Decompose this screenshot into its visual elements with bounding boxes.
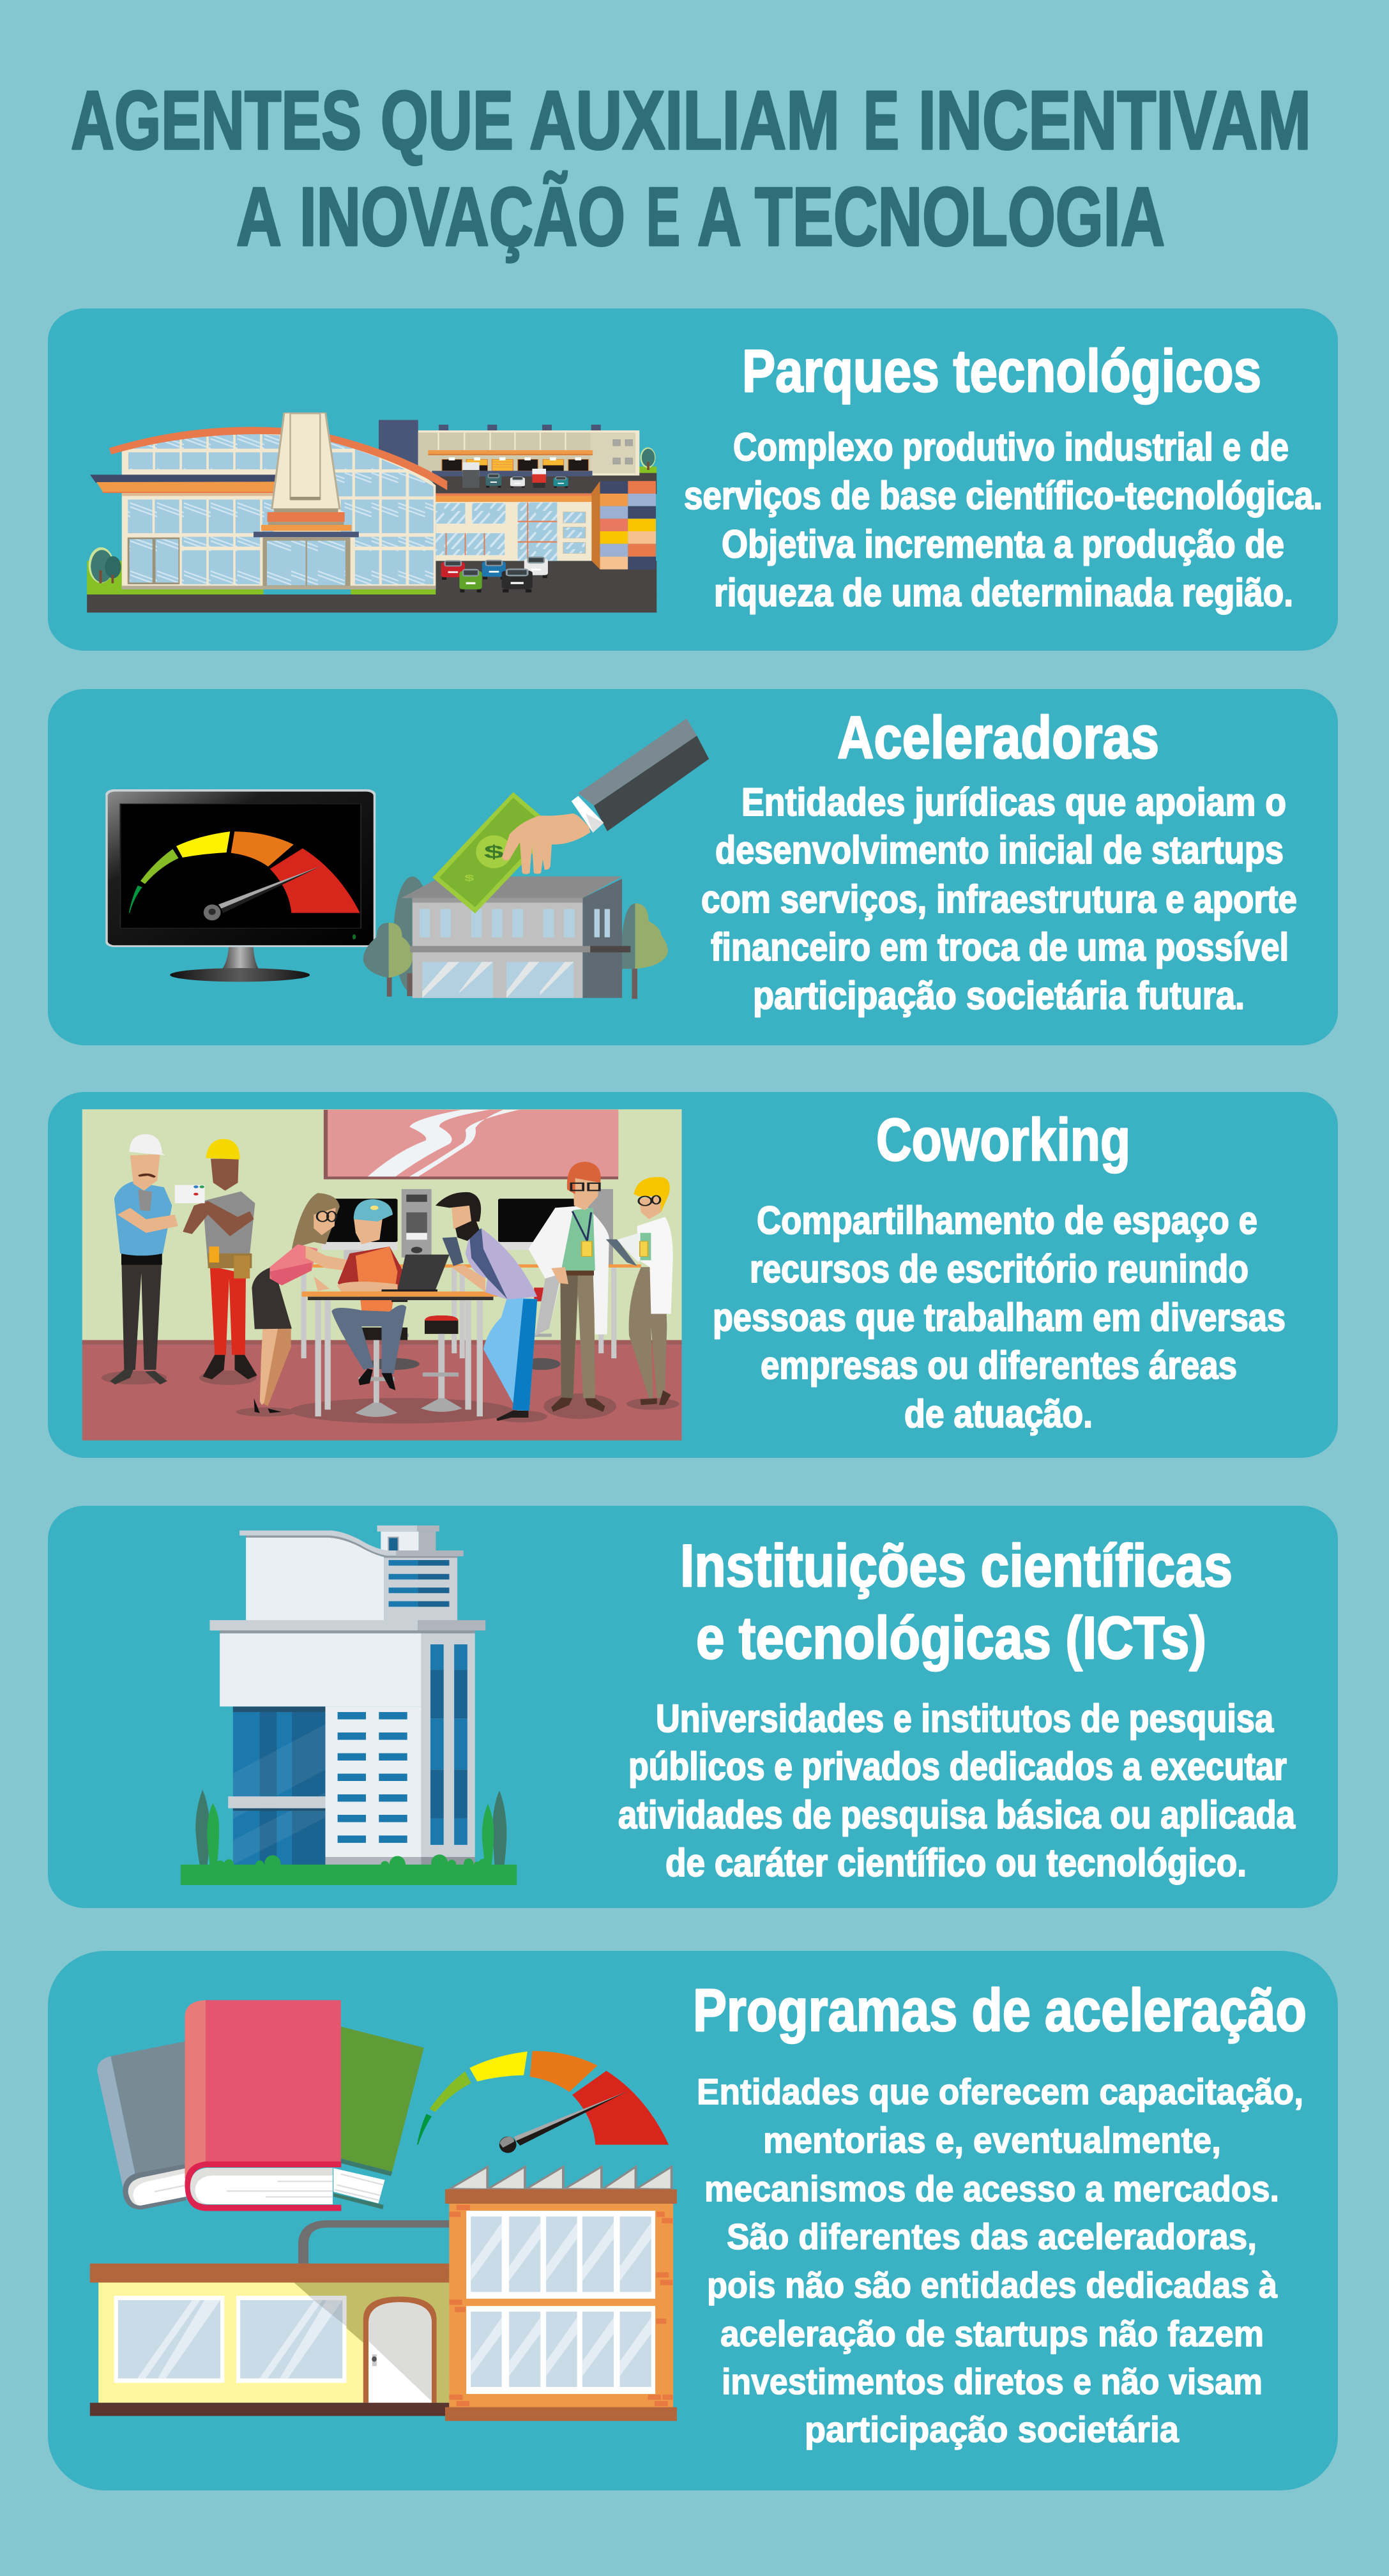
title: A — [697, 170, 741, 263]
pipe — [303, 2224, 449, 2264]
description: programas de aceleração: Entidades que oferecem capacitação, — [697, 2072, 1303, 2112]
description: programas de aceleração — [697, 2072, 1303, 2450]
illustration: hand inserting money into building: $ — [484, 842, 504, 862]
title: TECNOLOGIA — [755, 170, 1165, 263]
description: programas de aceleração: São diferentes das aceleradoras, — [727, 2216, 1257, 2257]
heading: instituições científicas e tecnológicas: e tecnológicas (ICTs) — [696, 1604, 1206, 1671]
description: aceleradoras: participação societária futura. — [753, 974, 1245, 1017]
description: coworking — [713, 1199, 1286, 1436]
illustration: people working in a shared office — [82, 1109, 682, 1441]
heading: coworking: Coworking — [876, 1106, 1130, 1173]
description: instituições científicas: públicos e privados dedicados a executar — [628, 1745, 1287, 1788]
person: bearded man with tablet — [436, 1192, 537, 1421]
icon: grey book — [97, 2042, 186, 2209]
person: woman pointing — [252, 1193, 390, 1413]
icon: green book — [333, 2027, 424, 2209]
description: programas de aceleração: investimentos diretos e não visam — [722, 2361, 1263, 2402]
icon: red book — [185, 2000, 341, 2211]
description: aceleradoras: desenvolvimento inicial de startups — [715, 828, 1284, 872]
description: programas de aceleração: pois não são entidades dedicadas à — [707, 2265, 1277, 2306]
heading: instituições científicas e tecnológicas — [680, 1532, 1233, 1671]
description: aceleradoras — [701, 780, 1297, 1017]
description: coworking: empresas ou diferentes áreas — [761, 1344, 1237, 1387]
panel: instituições científicas — [48, 1506, 1338, 1908]
description: coworking: Compartilhamento de espaço e — [757, 1199, 1257, 1242]
title: QUE — [381, 73, 513, 167]
description: instituições científicas: Universidades e institutos de pesquisa — [656, 1697, 1274, 1740]
panel: aceleradoras — [48, 689, 1338, 1045]
illustration: books, speedometer and buildings — [90, 2000, 677, 2421]
description: parques tecnológicos — [684, 425, 1323, 614]
description: parques tecnológicos: riqueza de uma determinada região. — [714, 571, 1293, 614]
illustration: technology park buildings and cars — [87, 413, 657, 612]
icon: orange brick building — [445, 2167, 677, 2421]
icon: speedometer — [417, 2051, 669, 2153]
person: man with white helmet — [110, 1134, 178, 1384]
icon: yellow building — [90, 2264, 449, 2416]
title: INOVAÇÃO — [300, 170, 625, 263]
person: man with yellow helmet — [175, 1139, 257, 1379]
person: doctor with red hair — [529, 1162, 637, 1412]
description: aceleradoras: Entidades jurídicas que apoiam o — [741, 780, 1286, 824]
description: coworking: pessoas que trabalham em diversas — [713, 1296, 1286, 1339]
heading: aceleradoras: Aceleradoras — [837, 704, 1159, 771]
description: instituições científicas: atividades de pesquisa básica ou aplicada — [618, 1793, 1296, 1837]
title: AUXILIAM — [529, 73, 840, 167]
description: parques tecnológicos: Complexo produtivo industrial e de — [733, 425, 1289, 469]
description: coworking: recursos de escritório reunindo — [750, 1247, 1249, 1291]
title: A — [236, 170, 282, 263]
title — [71, 73, 1311, 263]
description: aceleradoras: financeiro em troca de uma possível — [711, 925, 1289, 969]
description: programas de aceleração: mentorias e, eventualmente, — [763, 2120, 1221, 2161]
description: programas de aceleração: mecanismos de acesso a mercados. — [704, 2169, 1279, 2209]
title: E — [646, 170, 680, 263]
stools — [355, 1315, 462, 1417]
illustration: office tower — [181, 1526, 517, 1885]
description: programas de aceleração: participação societária — [805, 2409, 1180, 2450]
description: programas de aceleração: aceleração de startups não fazem — [720, 2314, 1264, 2354]
illustration: hand inserting money into building: $ — [464, 874, 474, 883]
description: instituições científicas — [618, 1697, 1296, 1884]
description: coworking: de atuação. — [904, 1392, 1093, 1436]
illustration: hand inserting money into building — [363, 718, 709, 999]
panel: programas de aceleração — [48, 1951, 1338, 2490]
title: AGENTES — [71, 73, 361, 167]
heading: instituições científicas e tecnológicas: Instituições científicas — [680, 1532, 1233, 1599]
description: aceleradoras: com serviços, infraestrutura e aporte — [701, 877, 1297, 921]
person: seated man with cap and laptop — [331, 1199, 450, 1390]
description: instituições científicas: de caráter científico ou tecnológico. — [665, 1841, 1247, 1884]
panel: coworking — [48, 1092, 1338, 1458]
description: parques tecnológicos: Objetiva incrementa a produção de — [722, 522, 1284, 566]
title: E — [863, 73, 899, 167]
person: blonde doctor — [617, 1177, 673, 1405]
illustration: monitor with speedometer — [105, 789, 376, 981]
heading: parques tecnológicos: Parques tecnológicos — [742, 337, 1261, 404]
panel: parques tecnológicos — [48, 308, 1338, 651]
front desk — [301, 1291, 501, 1416]
